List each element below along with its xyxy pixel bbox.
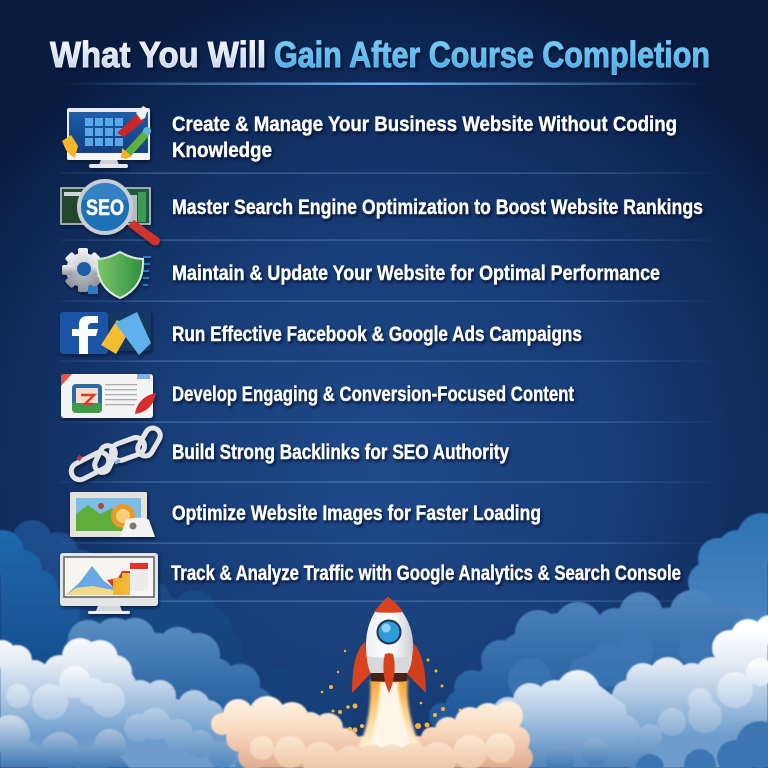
item 1 text: Knowledge — [172, 139, 272, 162]
clouds: center peach ridge — [211, 696, 533, 768]
benefit list text — [171, 113, 703, 585]
body — [366, 597, 413, 675]
left fin — [352, 642, 372, 693]
title: What You Will — [50, 34, 266, 75]
item 1 text: Create & Manage Your Business Website Without Coding — [172, 113, 677, 136]
right fin — [405, 642, 426, 693]
title — [50, 34, 710, 75]
clouds: front left — [0, 638, 262, 768]
row dividers — [60, 172, 725, 602]
engine band — [371, 673, 407, 682]
title underline glow — [60, 82, 710, 85]
icon: SEO magnifier: SEO — [86, 195, 124, 220]
rocket — [352, 597, 426, 693]
clouds: back right — [429, 513, 768, 745]
sparks — [321, 650, 462, 732]
icon: chain links — [68, 425, 163, 483]
icon: content card — [61, 374, 156, 418]
item 6 text: Build Strong Backlinks for SEO Authority — [172, 441, 509, 464]
window — [378, 620, 400, 644]
item 3 text: Maintain & Update Your Website for Optimal Performance — [172, 262, 660, 285]
rocket exhaust flame — [358, 680, 422, 750]
icon: gear and shield — [62, 248, 151, 298]
nose cone — [374, 597, 403, 613]
icon: analytics monitor — [60, 553, 158, 614]
icon: image optimization — [70, 492, 155, 537]
item 1 text — [172, 113, 677, 162]
icon: SEO magnifier — [61, 181, 160, 246]
icon: website builder monitor — [62, 106, 151, 168]
item 5 text: Develop Engaging & Conversion-Focused Content — [172, 383, 574, 406]
icon: Facebook and Google Ads — [60, 311, 151, 355]
center fin — [383, 653, 395, 693]
clouds: back left — [0, 520, 353, 768]
item 7 text: Optimize Website Images for Faster Loading — [172, 502, 541, 525]
clouds: center foreground puffs — [250, 733, 515, 768]
item 4 text: Run Effective Facebook & Google Ads Campaigns — [172, 323, 582, 346]
clouds: front right — [490, 615, 768, 768]
